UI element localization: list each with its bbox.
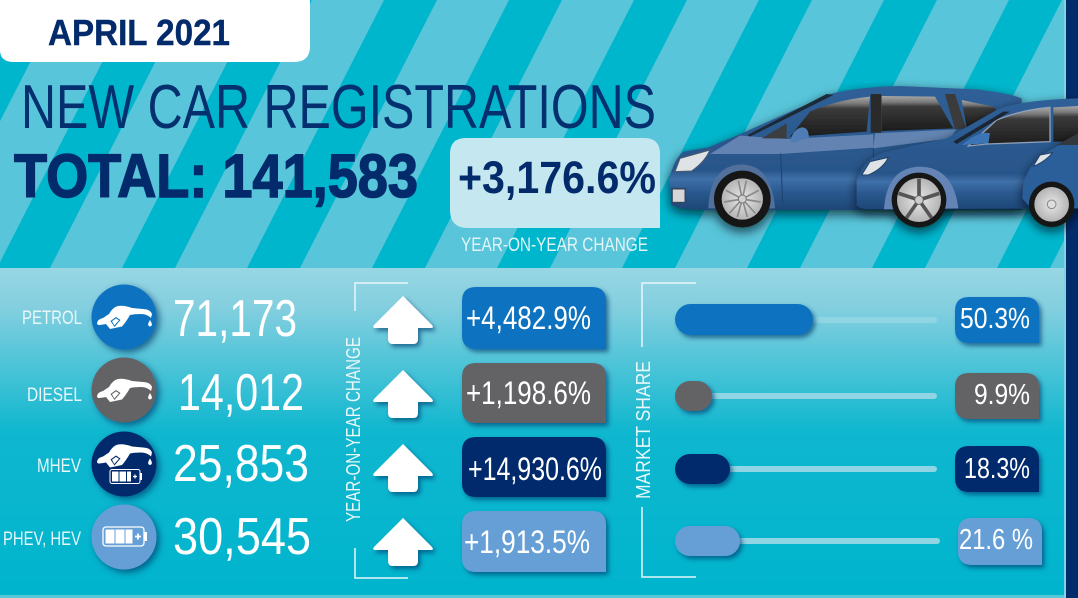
headline change caption: YEAR-ON-YEAR CHANGE [461, 235, 648, 256]
bar: PHEV, HEV share [675, 526, 940, 556]
lower panel background [0, 268, 1066, 595]
share badge: MHEV [955, 446, 1039, 492]
change badge: MHEV [462, 437, 606, 497]
background stripes [0, 0, 1078, 268]
row: PHEV, HEV: PHEV, HEV [3, 529, 81, 550]
change badge: PHEV, HEV [462, 511, 606, 572]
title: NEW CAR REGISTRATIONS [21, 73, 656, 142]
middle car [857, 98, 1078, 227]
year-on-year axis label: YEAR-ON-YEAR CHANGE [343, 337, 365, 522]
change badge: PHEV, HEV: +1,913.5% [464, 524, 590, 560]
row: PHEV, HEV: 30,545 [173, 508, 311, 566]
row: MHEV [37, 432, 309, 496]
icon: petrol pump [92, 284, 156, 350]
share badge: petrol: 50.3% [960, 303, 1030, 335]
icon: pump and battery [92, 432, 156, 496]
share badge: petrol [955, 297, 1039, 343]
headline change callout [450, 138, 660, 228]
share badge: diesel [955, 373, 1039, 419]
date tab: APRIL 2021 [48, 12, 230, 53]
date tab [0, 0, 310, 62]
icon: diesel pump [92, 358, 156, 422]
change badge: petrol: +4,482.9% [466, 300, 591, 336]
share badge: MHEV: 18.3% [964, 453, 1030, 485]
row: diesel: 14,012 [178, 364, 304, 422]
share badge: PHEV, HEV: 21.6 % [959, 524, 1033, 556]
change badge: MHEV: +14,930.6% [468, 451, 602, 487]
row: petrol [22, 284, 297, 350]
row: PHEV, HEV [3, 504, 311, 570]
headline change callout: +3,176.6% [458, 152, 656, 203]
change badge: petrol [462, 287, 606, 349]
car illustration [669, 86, 1078, 227]
market share bracket [642, 283, 696, 577]
market share axis label: MARKET SHARE [633, 361, 655, 499]
row: petrol: 71,173 [173, 290, 297, 348]
bar: MHEV share [675, 454, 937, 484]
row: diesel [27, 358, 304, 422]
year-on-year bracket [355, 283, 408, 578]
bar: diesel share [675, 381, 937, 411]
icon: battery [92, 504, 156, 570]
change badge: diesel: +1,198.6% [466, 375, 591, 411]
share badge: diesel: 9.9% [974, 379, 1030, 411]
row: diesel: DIESEL [27, 385, 82, 406]
bar: petrol share [675, 304, 937, 335]
total figure: TOTAL: 141,583 [14, 142, 418, 210]
front car [1022, 133, 1078, 227]
share badge: PHEV, HEV [958, 518, 1042, 565]
change badge: diesel [462, 363, 606, 423]
arrows up [373, 296, 433, 566]
row: MHEV: MHEV [37, 456, 81, 477]
row: MHEV: 25,853 [173, 435, 309, 493]
row: petrol: PETROL [22, 308, 82, 329]
back car [669, 86, 1022, 227]
right navy bar [1066, 0, 1078, 598]
